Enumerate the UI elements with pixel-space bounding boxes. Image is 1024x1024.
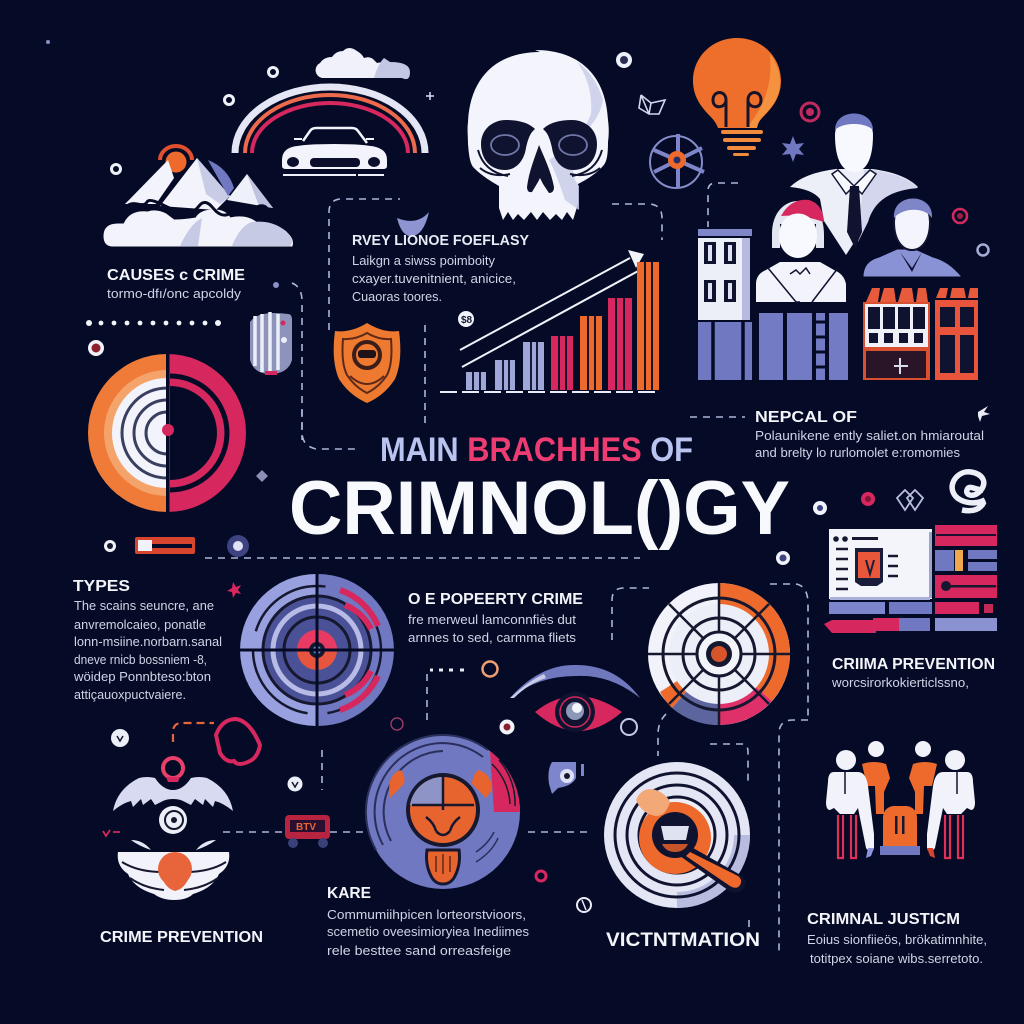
icon: winged emblem — [111, 719, 302, 900]
title: MAIN BRACHHES OF — [380, 431, 693, 469]
text: criminal justice: CRIMNAL JUSTICM — [807, 911, 960, 928]
text: crime prevention left: CRIME PREVENTION — [100, 929, 263, 946]
small rings top left — [112, 68, 278, 174]
title: CRIMNOL()GY — [289, 466, 790, 551]
text: kare: rele besttee sand orreasfeige — [327, 943, 511, 958]
text: types: attiçauoxpuctvaiere. — [74, 687, 186, 702]
text: kare: Commumiihpicen lorteorstvioors, — [327, 907, 526, 922]
text: of property crime: fre merweul lamconnfiės dut — [408, 612, 576, 627]
text: causes of crime: tormo-dfı/onc apcoldy — [107, 286, 242, 301]
text: types — [73, 578, 222, 702]
icon: shield — [334, 323, 400, 403]
text: of property crime: arnnes to sed, carmma fliets — [408, 630, 577, 645]
text: crime prevention right: worcsirorkokierticlssno, — [831, 675, 969, 690]
icon: skull — [468, 50, 609, 220]
icon: eye — [391, 662, 640, 735]
text: key lionoe block: RVEY LIONOE FOEFLASY — [352, 233, 529, 249]
text: types: wöidep Ponnbteso:bton — [73, 669, 211, 684]
connector lines — [103, 183, 808, 955]
icon: light bulb — [693, 38, 781, 156]
title — [289, 431, 790, 551]
small icons: gear, crystal and star — [46, 40, 988, 256]
icon: mountains and cloud — [104, 146, 292, 246]
text: types: The scains seuncre, ane — [74, 598, 214, 613]
small icon: red badge: BTV — [296, 822, 316, 833]
icon: rainbow and car — [235, 87, 425, 175]
chart: victimisation target with magnifier — [604, 762, 750, 908]
text: kare — [327, 885, 529, 958]
text: kare: KARE — [327, 885, 371, 902]
text: impact of — [755, 409, 984, 460]
text: crime prevention right — [831, 656, 995, 690]
text: of property crime — [408, 591, 583, 645]
bar chart with trend arrow: $8 — [461, 315, 473, 326]
text: criminal justice: Eoius sionfiieös, brökatimnhite, — [807, 932, 987, 947]
icon: small red ring — [88, 340, 104, 356]
small icons: right column — [776, 406, 990, 565]
text: key lionoe block: Laikgn a siwss poimboity — [352, 253, 495, 268]
text: key lionoe block: cxayer.tuvenitnient, anicice, — [352, 271, 516, 286]
text: types: dneve rnicb bossniem -8, — [74, 652, 207, 667]
text: criminal justice: totitpex soiane wibs.serretoto. — [810, 951, 983, 966]
bar chart with trend arrow — [440, 250, 660, 392]
icon: group of executives — [790, 114, 962, 277]
text: kare: scemetio oveesimioryiea Inediimes — [327, 924, 529, 939]
icon: device with stripes — [250, 282, 292, 375]
icon: building — [698, 229, 752, 380]
icon: group of people — [826, 741, 975, 858]
text: types: lonn-msiine.norbarn.sanal — [74, 634, 222, 649]
icon: cloud over rainbow — [316, 48, 410, 79]
small icon: key device — [104, 470, 268, 557]
chart: types target — [227, 572, 396, 728]
text: causes of crime: CAUSES c CRIME — [107, 267, 245, 284]
panel: dashboard interface — [824, 525, 997, 633]
dotted row — [86, 320, 221, 326]
text: types: anvremolcaieo, ponatle — [74, 617, 206, 632]
small icon: red badge — [285, 815, 330, 848]
text: criminal justice — [807, 911, 987, 966]
text: impact of: and brelty lo rurlomolet e:romomies — [755, 445, 961, 460]
text: key lionoe block — [352, 233, 529, 304]
text: impact of: NEPCAL OF — [755, 409, 857, 426]
icon: person with red cap — [756, 200, 848, 380]
text: impact of: Polaunikene ently saliet.on hmiaroutal — [755, 428, 984, 443]
text: crime prevention right: CRIIMA PREVENTION — [832, 656, 995, 673]
text: types: TYPES — [73, 578, 130, 595]
text: of property crime: O E POPEERTY CRIME — [408, 591, 583, 608]
chart: causes ring diagram — [88, 352, 246, 514]
small icon: seal between targets — [548, 762, 591, 912]
chart: prevention target — [648, 583, 790, 725]
text: key lionoe block: Cuaoras toores. — [352, 289, 442, 304]
text: victimisation: VICTNTMATION — [606, 930, 760, 951]
text: causes of crime — [107, 267, 245, 301]
icon: red city buildings — [863, 288, 978, 380]
chart: central mask target — [366, 735, 546, 889]
